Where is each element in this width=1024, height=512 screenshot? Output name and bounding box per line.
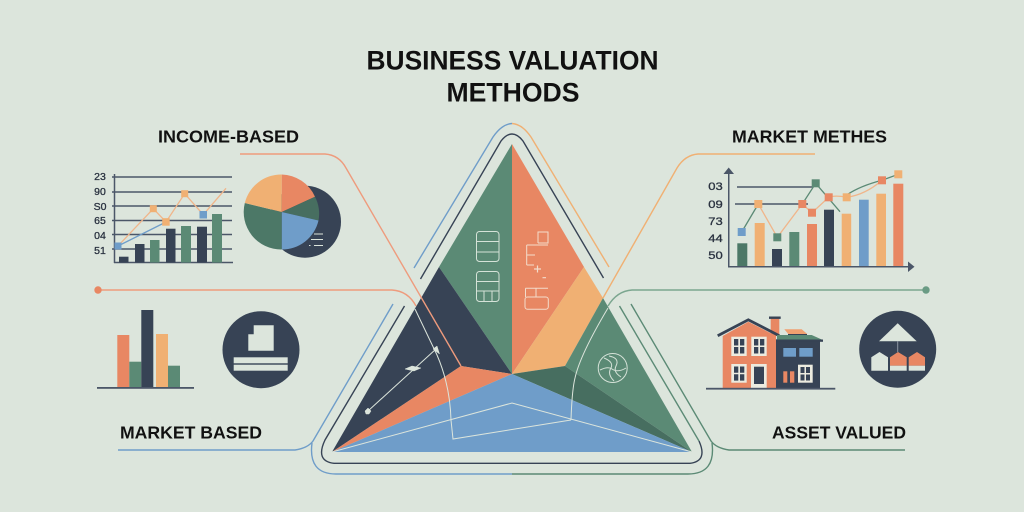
segment: dark green [512,366,692,452]
frame: blue lower left with leader [118,304,393,450]
markers [114,190,207,250]
windows [731,337,813,383]
navy roof [718,320,779,336]
axis labels: 90 [94,186,106,198]
axis labels: 44 [708,233,723,245]
icon: left document blocks [476,232,499,302]
markers [738,170,902,241]
frame: navy upper [420,134,604,279]
reference lines [735,187,813,204]
heading: asset valued: ASSET VALUED [772,423,906,443]
segment: top right orange [512,144,584,374]
orange body [723,322,776,388]
icon: arrow with diamond [365,346,440,414]
frame: green middle right [620,306,699,441]
navy body [776,339,820,388]
door [751,364,767,389]
frame: outer blue base [312,443,512,474]
dot: left [94,286,102,294]
leader lines [94,154,930,366]
chart: income line and bars [94,171,233,263]
axis labels: 04 [94,230,106,242]
chart: income pie [244,174,341,258]
chart: market based bars [97,310,194,389]
axis labels: 03 [708,181,723,193]
back navy circle [269,186,341,258]
axis labels: 09 [708,199,723,211]
leader: income-based [240,154,461,366]
axis labels: 65 [94,215,106,227]
axis labels: 50 [708,250,723,262]
pie slices [244,174,319,250]
segment: lower right green [565,298,692,452]
axis labels: 51 [94,245,106,257]
icon: market based navy circle [222,311,300,388]
icon: house [706,316,835,390]
trend lines [742,174,898,237]
bars [119,214,222,262]
segment: lower left orange [332,366,512,452]
bars [737,184,903,266]
axis labels [708,181,723,262]
axes [724,168,914,272]
dot: right [922,286,930,294]
leader: asset valued dot line [608,290,926,306]
central triangle diagram [332,144,692,452]
title: METHODS [446,78,580,108]
heading: market based: MARKET BASED [120,423,262,443]
heading: income-based: INCOME-BASED [158,127,299,147]
segment: navy [332,267,512,452]
white inner lines [332,308,692,452]
chart: market bars and lines [708,168,914,272]
axis labels: S0 [94,201,107,213]
frame: green lower right with leader [631,304,905,450]
axis labels [94,171,107,257]
frame: navy lower left and base [322,306,702,463]
icon: right glyph lines [525,232,548,309]
axis labels: 73 [708,216,723,228]
heading: market methes: MARKET METHES [732,127,887,147]
leader: market methods [603,154,815,298]
leader: market based dot line [98,290,416,306]
orange panel on roof [784,329,807,334]
segment: top left green [439,144,512,374]
frame: orange upper right [512,124,609,267]
triangle frame outlines [118,124,905,474]
grid lines [112,174,233,263]
chimney [771,318,779,336]
title: BUSINESS VALUATION [366,45,658,75]
segment: light orange [512,267,603,374]
icon: spiral circle [598,354,627,382]
segment: blue base [332,374,692,452]
frame: outer green base [512,443,712,474]
ground line [706,388,835,390]
axis labels: 23 [94,171,106,183]
icon: asset valued navy circle [859,311,936,388]
frame: blue upper left [414,124,512,268]
trend lines [118,188,226,246]
title [366,45,658,108]
small legend lines [309,234,323,246]
